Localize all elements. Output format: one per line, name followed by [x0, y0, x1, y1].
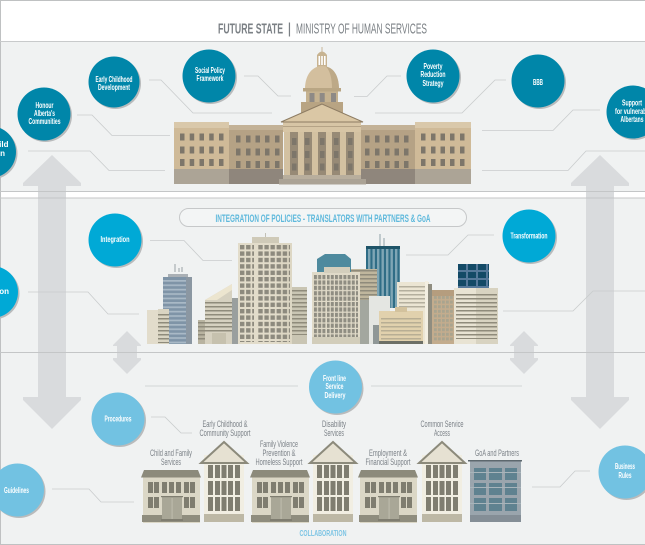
label: early childhood: Community Support [200, 428, 251, 439]
mid white tower [312, 267, 390, 344]
arrow: small right two-way [510, 331, 538, 374]
left inner wing [229, 125, 283, 184]
circle: social policy framework: Framework [196, 74, 224, 83]
building: family violence [250, 470, 310, 523]
arrow: small left two-way [113, 331, 141, 374]
label: common service access: Common Service [420, 419, 464, 430]
circle: honour communities: Alberta's [34, 109, 55, 118]
circle: procedures [92, 392, 146, 447]
circle: procedures: Procedures [104, 414, 132, 424]
integration banner: INTEGRATION OF POLICIES - TRANSLATORS WITH PARTNERS & GoA [216, 213, 431, 225]
circle: guidelines [0, 464, 46, 518]
blue tower [163, 264, 192, 344]
integration banner [180, 208, 466, 226]
label: disability services: Disability [322, 419, 346, 430]
tan striped block [351, 269, 377, 301]
circle: business rules: Rules [618, 471, 632, 480]
circle: honour communities [18, 88, 72, 142]
circle: integration: Integration [100, 235, 130, 244]
building: common service access [419, 442, 465, 522]
teal crown [317, 254, 351, 272]
title: | [288, 20, 291, 38]
label: disability services: Services [324, 428, 344, 439]
right outer wing [415, 122, 471, 184]
title: MINISTRY OF HUMAN SERVICES [296, 20, 427, 38]
circle: poverty reduction strategy [406, 50, 461, 104]
portico [279, 104, 366, 184]
circle: poverty reduction strategy: Strategy [422, 79, 444, 88]
label: child and family services: Services [161, 457, 181, 468]
cream wide block [454, 288, 498, 344]
navy glass top [458, 264, 489, 289]
label: employment and financial: Employment & [369, 448, 407, 459]
slanted building [198, 284, 239, 344]
building: early childhood [201, 442, 247, 522]
circle: legislation [0, 266, 20, 320]
circle: early childhood development [88, 56, 141, 109]
title: FUTURE STATE [218, 20, 283, 38]
connector lines [28, 76, 645, 502]
circle: honour communities: Communities [28, 117, 61, 126]
dark teal tower [366, 234, 400, 308]
circle: social policy framework: Social Policy [195, 66, 225, 75]
circle: front line service delivery: Front line [323, 374, 346, 383]
cream striped tower [397, 281, 432, 344]
left outer wing [174, 122, 229, 184]
building: GoA and partners [468, 460, 522, 522]
circle: BBB [512, 54, 566, 109]
circle: early childhood development: Early Childhood [96, 75, 133, 84]
collaboration buildings row [141, 442, 522, 523]
circle: front line service delivery: Service [326, 382, 344, 391]
title [218, 20, 427, 38]
right inner wing [360, 125, 415, 184]
low beige block [147, 309, 169, 344]
circle: BBB: BBB [533, 78, 543, 87]
label: GoA and partners: GoA and Partners [475, 448, 519, 459]
label: family violence: Homeless Support [256, 457, 303, 468]
label: early childhood: Early Childhood & [202, 419, 248, 430]
circle: integration [88, 214, 143, 268]
circle: front line service delivery [309, 360, 364, 415]
arrow: large right two-way [571, 155, 629, 429]
building: child and family services [141, 470, 201, 523]
label: child and family services: Child and Family [150, 448, 192, 459]
label: family violence: Family Violence [260, 439, 298, 450]
tall central tower [238, 233, 292, 344]
circle: social policy framework [182, 50, 237, 104]
circle: poverty reduction strategy: Poverty [424, 62, 443, 71]
tan grid block [432, 290, 454, 344]
label: employment and financial: Financial Support [366, 457, 411, 468]
dome [301, 47, 343, 113]
circle: business rules [598, 446, 645, 500]
circle: honour communities: Honour [36, 101, 54, 110]
circle: transformation: Transformation [510, 232, 548, 240]
circle: support vulnerable albertans [606, 86, 645, 140]
circle: child intervention [0, 126, 18, 180]
building: employment and financial [358, 470, 418, 523]
arrow: large left two-way [23, 155, 81, 429]
label: collaboration: COLLABORATION [300, 528, 346, 538]
circle: guidelines: Guidelines [4, 486, 29, 495]
label: common service access: Access [434, 428, 450, 439]
circle: front line service delivery: Delivery [324, 391, 346, 400]
side striped block [292, 287, 307, 344]
city skyline [147, 233, 498, 344]
circle: early childhood development: Development [98, 83, 130, 92]
label: family violence: Prevention & [262, 448, 296, 459]
circle: transformation [502, 210, 557, 264]
heritage low building [373, 307, 423, 344]
building: disability services [310, 442, 356, 522]
legislature building [174, 47, 471, 184]
circle: poverty reduction strategy: Reduction [420, 70, 446, 79]
